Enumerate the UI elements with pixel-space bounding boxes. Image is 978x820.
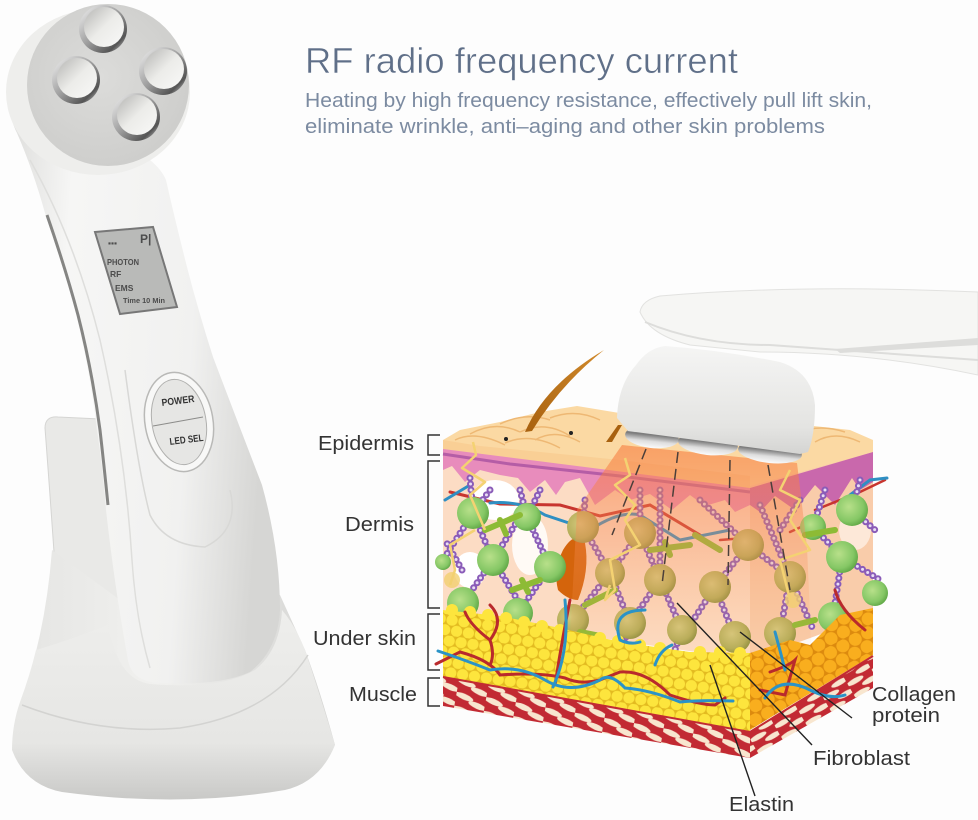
muscle left face	[443, 677, 750, 758]
under-skin fat left face	[443, 610, 750, 732]
wand shadow line	[835, 338, 978, 353]
power and LED buttons: LED SEL	[169, 433, 204, 448]
LCD screen: Time 10 Min	[123, 296, 165, 305]
red arteries in fat	[436, 590, 865, 705]
hair shaft	[525, 350, 604, 432]
muscle right face	[750, 656, 873, 758]
left labels: Dermis	[345, 514, 414, 536]
electrode: bottom	[112, 93, 160, 141]
electrode: left	[52, 56, 100, 104]
fat cell scallops on top edge	[446, 604, 746, 659]
device head applied to skin	[617, 289, 978, 466]
skin scale arcs	[455, 413, 860, 448]
device: handheld RF beauty wand on stand	[6, 4, 335, 800]
LCD screen	[95, 227, 177, 314]
left face dermis	[443, 448, 750, 660]
body inner edge highlight	[30, 160, 150, 668]
right labels: protein	[872, 705, 940, 727]
muscle top edge	[443, 656, 873, 732]
electrode: right	[139, 47, 187, 95]
chrome electrode: left	[624, 423, 680, 451]
left labels: Epidermis	[318, 433, 414, 455]
LCD screen: PHOTON	[107, 257, 139, 267]
subtitle text	[305, 90, 872, 138]
under-skin fat right face	[750, 608, 873, 730]
LCD screen: ▪▪▪	[108, 238, 117, 248]
pink upper dermis right	[750, 452, 873, 512]
right face dermis	[750, 452, 873, 660]
green cells	[435, 494, 888, 632]
electrode: top	[79, 5, 127, 53]
fibroblasts	[485, 515, 835, 660]
wand body band	[640, 289, 978, 375]
second hair stub	[606, 425, 622, 442]
hair follicle pores	[504, 431, 573, 441]
dashed light rays	[612, 449, 790, 590]
stand front cradle	[12, 610, 335, 800]
wand lower edge	[645, 322, 978, 360]
subtitle text: eliminate wrinkle, anti–aging and other skin problems	[305, 116, 825, 138]
wand body	[8, 95, 280, 684]
blue veins in fat	[438, 600, 845, 702]
power and LED buttons	[137, 367, 221, 477]
pink upper dermis left	[443, 449, 750, 512]
yellow sensory nerves	[450, 442, 810, 600]
nerve ends	[444, 572, 801, 608]
blood vessels in dermis	[445, 478, 887, 540]
olive cells under light	[557, 511, 806, 653]
stand body	[12, 550, 335, 759]
power and LED buttons: POWER	[161, 394, 196, 409]
chrome electrode: right	[737, 438, 803, 466]
layer brackets	[428, 435, 440, 706]
chrome electrode: middle	[677, 430, 739, 458]
purple pigment line	[443, 454, 750, 492]
left labels: Under skin	[313, 628, 416, 650]
head dome	[617, 346, 815, 454]
light beam	[570, 445, 812, 660]
head rim	[6, 9, 190, 175]
right labels: Elastin	[729, 794, 794, 816]
LCD screen: P|	[140, 232, 151, 246]
hair follicle	[556, 538, 586, 600]
LCD screen: RF	[110, 269, 121, 279]
title: RF radio frequency current	[305, 40, 738, 81]
left labels: Muscle	[349, 684, 417, 706]
LCD screen: EMS	[115, 283, 134, 293]
silver side strip	[47, 215, 108, 505]
skin cross-section diagram	[435, 406, 888, 758]
left labels	[313, 433, 417, 706]
epidermis top surface	[443, 406, 873, 488]
stand back plate	[45, 417, 130, 640]
right labels: Collagen	[872, 684, 956, 706]
subtitle text: Heating by high frequency resistance, effectively pull lift skin,	[305, 90, 872, 112]
right labels: Fibroblast	[813, 748, 910, 770]
right labels	[729, 684, 956, 816]
head grey disk	[27, 4, 189, 166]
stand rim shadow	[22, 655, 308, 729]
collagen chains	[443, 478, 880, 670]
pointer lines	[677, 603, 852, 796]
epidermis front strip	[443, 440, 750, 490]
white dermis blotches	[454, 480, 871, 588]
button groove	[125, 370, 232, 547]
